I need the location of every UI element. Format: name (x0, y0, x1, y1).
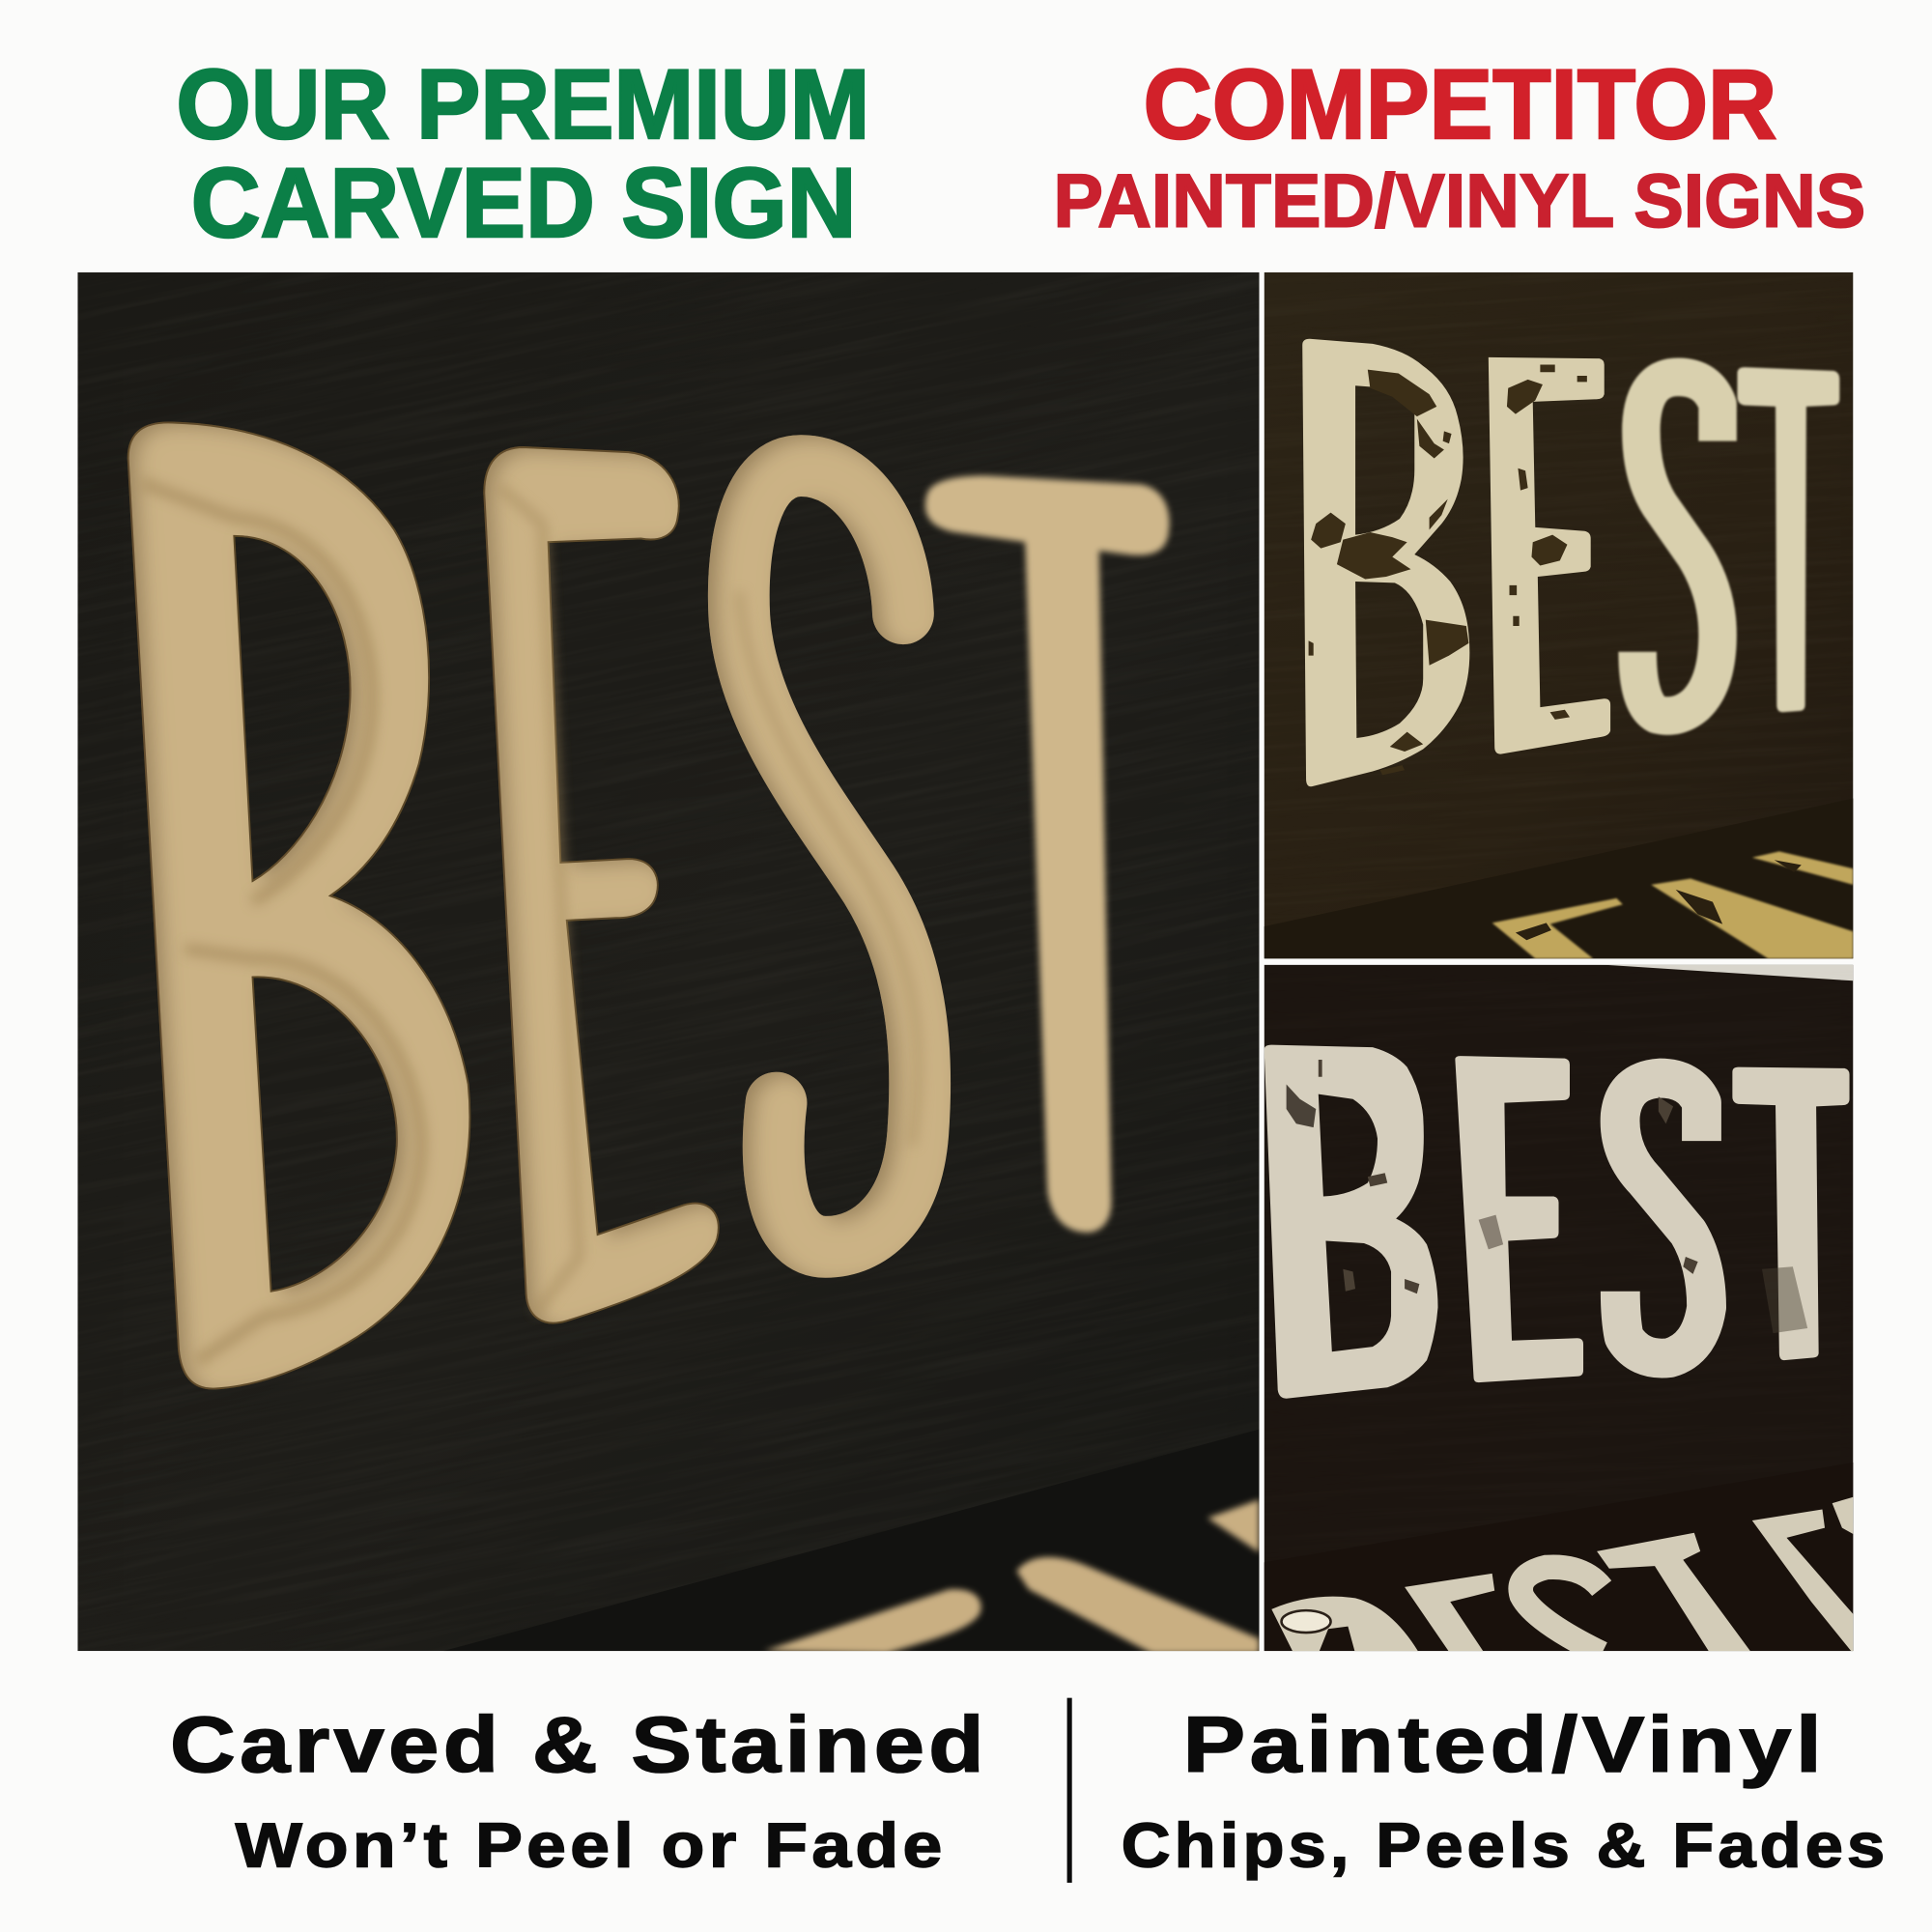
carved letters, lower board (764, 1499, 1260, 1654)
vinyl letter E (1455, 1056, 1583, 1382)
caption: painted/vinyl (1122, 1701, 1889, 1880)
caption: painted/vinyl: Painted/Vinyl (1182, 1701, 1826, 1789)
painted letter B (1302, 339, 1469, 786)
panel: carved sign photo (77, 272, 1260, 1652)
panel: vinyl sign, peeling (1264, 964, 1853, 1652)
bevel shading on E (499, 487, 579, 1312)
bevel shading on B (142, 483, 421, 1361)
peeling curl, lower board (1282, 1610, 1331, 1633)
lower board (1264, 1463, 1853, 1651)
background strip (1605, 964, 1853, 981)
lower board (443, 1430, 1260, 1651)
caption: carved and stained: Carved & Stained (170, 1701, 988, 1789)
vinyl letter S (1620, 1078, 1707, 1358)
lower board (1264, 799, 1853, 958)
heading: competitor painted/vinyl signs: PAINTED/VINYL SIGNS (1054, 160, 1865, 243)
carved letter B (128, 422, 469, 1389)
caption: painted/vinyl: Chips, Peels & Fades (1122, 1809, 1889, 1880)
heading: competitor painted/vinyl signs (1054, 49, 1865, 243)
painted letters, lower board (1492, 851, 1853, 958)
painted letter T (1737, 367, 1839, 712)
heading: our premium carved sign (176, 49, 870, 258)
bevel shading on S (739, 591, 919, 1146)
vinyl letters, lower board (1271, 1497, 1853, 1654)
heading: our premium carved sign: CARVED SIGN (191, 148, 856, 258)
heading: our premium carved sign: OUR PREMIUM (176, 49, 870, 159)
heading: competitor painted/vinyl signs: COMPETITOR (1144, 49, 1776, 159)
caption: carved and stained (170, 1701, 988, 1880)
vinyl letter T (1732, 1067, 1850, 1360)
divider (1067, 1698, 1072, 1883)
carved letter T (925, 475, 1170, 1233)
painted letter S (1637, 377, 1718, 716)
carved letter E (484, 447, 719, 1323)
paint chips on E (1507, 365, 1587, 720)
panel: painted sign, chipping (1264, 272, 1853, 958)
carved letter S (739, 466, 920, 1247)
paint chips on B (1309, 370, 1468, 775)
painted letter E (1489, 357, 1610, 754)
peeling corner on B (1287, 1084, 1316, 1127)
wear marks on vinyl (1319, 1060, 1807, 1333)
caption: carved and stained: Won’t Peel or Fade (236, 1809, 947, 1880)
vinyl letter B (1264, 1045, 1438, 1399)
